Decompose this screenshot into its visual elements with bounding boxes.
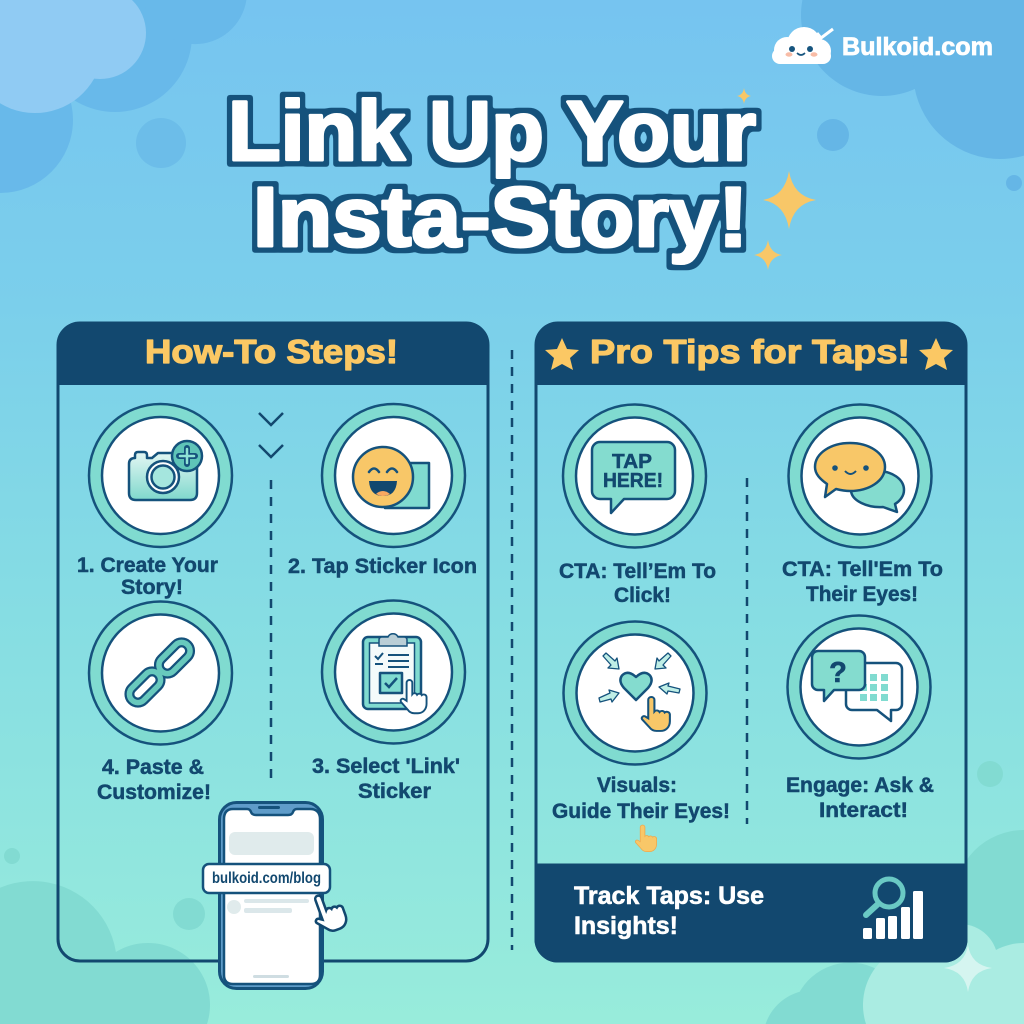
icon: magnifier and bars (863, 879, 923, 939)
panel: pro tips (536, 323, 966, 961)
tip 3: Guide Their Eyes! (552, 800, 730, 823)
step 4: 4. Paste & (102, 756, 204, 779)
tip 2 (782, 404, 943, 606)
sticker: link: bulkoid.com/blog (212, 870, 321, 887)
heading: how-to steps: How-To Steps! (145, 333, 398, 370)
icon: hand (308, 889, 349, 936)
step 3: 3. Select 'Link' (312, 755, 460, 778)
step 1: 1. Create Your (77, 554, 218, 577)
step 1 (77, 404, 232, 599)
title (228, 84, 756, 264)
logo (772, 27, 993, 64)
footer: track taps: Insights! (574, 912, 678, 940)
step 3: Sticker (358, 780, 431, 803)
tip 1: Click! (614, 584, 671, 607)
title: Insta-Story! (253, 170, 748, 264)
panel: how-to steps (58, 323, 488, 961)
tip 4: Engage: Ask & (786, 774, 934, 797)
tip 4: Interact! (819, 799, 908, 822)
step 4: Customize! (97, 781, 211, 804)
sparkle: bottom right (944, 945, 992, 992)
heading: pro tips (536, 323, 966, 385)
phone (203, 802, 349, 988)
heading: how-to steps (58, 323, 488, 385)
footer: track taps (536, 865, 966, 961)
tip 1: CTA: Tell’Em To (559, 560, 716, 583)
tip 2: CTA: Tell'Em To (782, 558, 943, 581)
tip 1: TAP (612, 451, 652, 473)
heading: pro tips: Pro Tips for Taps! (590, 333, 910, 370)
tip 2: Their Eyes! (806, 583, 918, 606)
tip 3 (552, 622, 730, 852)
logo: Bulkoid.com (842, 33, 993, 61)
tip 1: HERE! (603, 470, 663, 492)
sticker: link (203, 864, 330, 893)
title: Link Up Your (228, 84, 756, 178)
step 3 (312, 600, 465, 803)
tip 4: ? (829, 657, 847, 689)
step 4 (89, 602, 232, 804)
footer: track taps: Track Taps: Use (574, 882, 764, 910)
arrows: chevrons (259, 413, 283, 457)
icon: small hand (635, 825, 657, 852)
sparkles (737, 88, 816, 270)
tip 3: Visuals: (597, 774, 677, 797)
step 2: 2. Tap Sticker Icon (288, 555, 477, 578)
tip 4 (786, 616, 934, 822)
tip 1 (559, 404, 716, 607)
step 2 (288, 404, 477, 578)
step 1: Story! (121, 576, 183, 599)
